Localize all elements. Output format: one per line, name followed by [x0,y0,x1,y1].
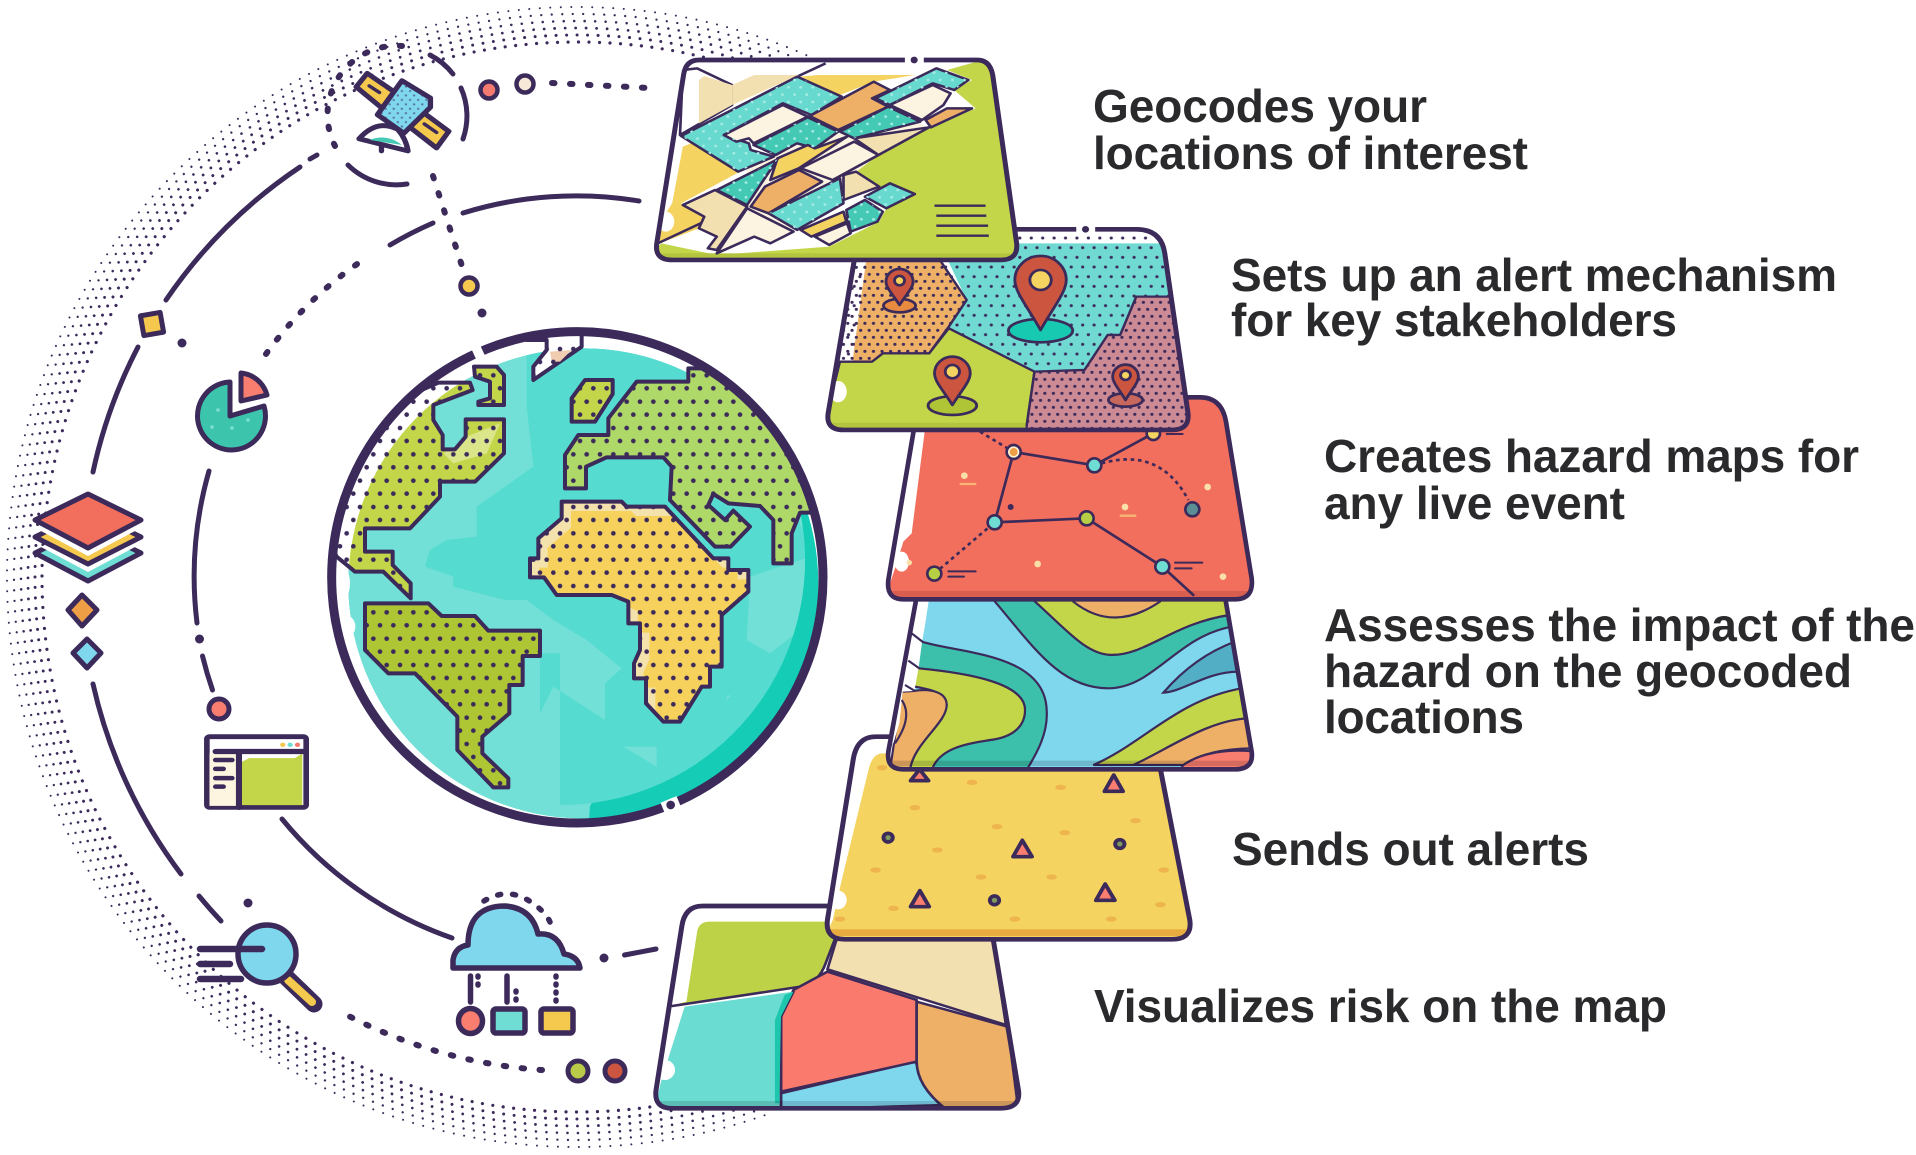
text: sets up an alert mechanism for key stakeholders [1231,249,1837,346]
icon: satellite [356,73,449,151]
text: creates hazard maps for any live event [1324,430,1859,529]
panel: hazard impact contour map [883,590,1260,772]
continent: North America [336,380,506,600]
icon: browser window [207,737,306,807]
continent: Canadian island [474,367,504,405]
icon: magnifier [200,925,314,1004]
bottom marker circles [568,1061,625,1081]
stippled outer halo [6,6,808,1148]
continent: Europe island [572,380,613,422]
panel: alert mechanism pin map [822,226,1197,433]
text: geocodes your locations of interest: locations of interest [1093,127,1528,179]
red marker circle [209,699,229,719]
text: assesses the impact of the hazard on the geocoded locations [1324,599,1915,743]
text: sets up an alert mechanism for key stakeholders: for key stakeholders [1231,294,1677,346]
satellite orbit ring [328,46,467,185]
icon: orange diamond [68,595,97,626]
satellite marker circles [460,76,534,294]
map pins [883,256,1143,415]
icon: cloud with connected nodes [453,894,580,1034]
panel: risk visualization map [651,906,1022,1110]
text: creates hazard maps for any live event: any live event [1324,477,1625,529]
globe [320,320,853,840]
text: creates hazard maps for any live event: Creates hazard maps for [1324,430,1859,482]
panel: geocoded locations map [647,57,1022,263]
text: assesses the impact of the hazard on the geocoded locations: locations [1324,691,1524,743]
panel: hazard map [880,390,1263,603]
continent: Asia [563,366,810,566]
continent: Africa [530,502,758,731]
text: geocodes your locations of interest: Geocodes your [1093,80,1427,132]
text: assesses the impact of the hazard on the geocoded locations: hazard on the geocoded [1324,645,1852,697]
text: assesses the impact of the hazard on the geocoded locations: Assesses the impact of the [1324,599,1915,651]
text: geocodes your locations of interest [1093,80,1528,179]
icon: blue diamond [73,639,101,668]
icon: stacked layers [35,494,141,581]
text: sets up an alert mechanism for key stakeholders: Sets up an alert mechanism [1231,249,1837,301]
text: visualizes risk on the map: Visualizes risk on the map [1094,980,1667,1032]
text: sends out alerts: Sends out alerts [1232,823,1589,875]
orbit lines and dotted paths [93,83,656,1070]
icon: yellow square marker [140,312,164,336]
hazard network lines and nodes [907,427,1226,595]
continent: Greenland [527,330,582,380]
icon: pie chart [197,373,267,450]
continent: South America [365,603,540,787]
panel: alerts map [822,737,1197,943]
